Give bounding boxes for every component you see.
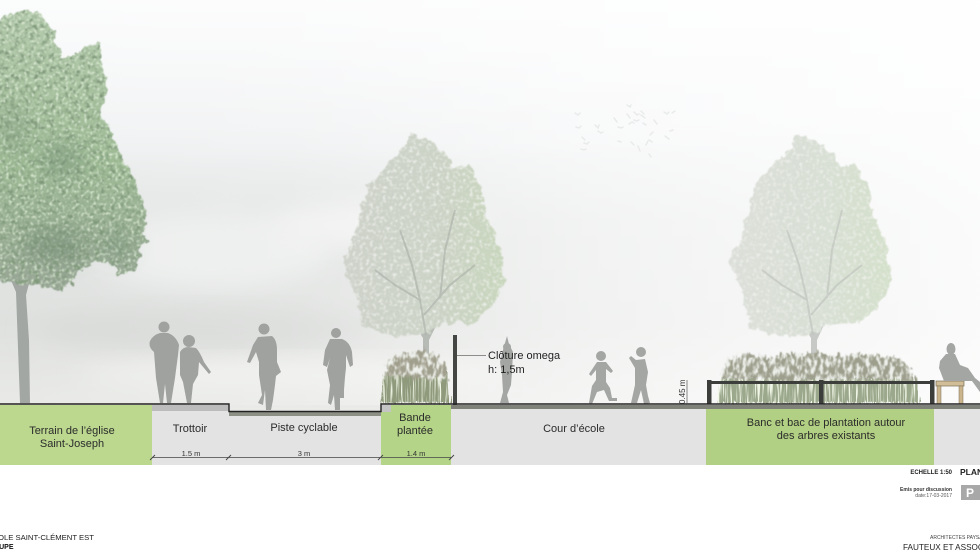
dimension: 0.45 m height: 0.45 m — [678, 379, 687, 404]
tree: middle tree — [343, 135, 505, 362]
trunk — [410, 312, 442, 362]
foliage — [0, 9, 145, 290]
bench — [936, 381, 964, 404]
trunk — [798, 312, 829, 362]
dimension: 1.4 m: 1.4 m — [407, 449, 425, 458]
label: banc et bac: Banc et bac de plantation autour — [747, 417, 905, 429]
ground: piste cyclable — [229, 412, 381, 465]
sky background — [0, 0, 980, 413]
planter: metal frame — [707, 380, 934, 404]
dimension: 1.5 m: 1.5 m — [182, 449, 200, 458]
ground: cour d'ecole — [451, 405, 980, 465]
callout: cloture omega: Clôture omega — [488, 350, 560, 362]
issue note: Emis pour discussion — [900, 487, 952, 493]
ground: trottoir — [152, 405, 229, 465]
label: cour d'ecole: Cour d’école — [543, 423, 605, 435]
plantation: bande plantee grasses — [380, 350, 450, 403]
label: terrain de l'eglise: Terrain de l’église — [29, 425, 115, 437]
issue note: date:17-03-2017 — [915, 493, 952, 499]
label: bande plantee: plantée — [397, 425, 433, 437]
people: cyclist one — [247, 324, 281, 410]
label: banc et bac: des arbres existants — [777, 430, 876, 442]
foliage — [730, 135, 892, 337]
label: terrain de l'eglise: Saint-Joseph — [40, 438, 104, 450]
dimension: 3 m: 3 m — [298, 449, 310, 458]
birds — [575, 105, 675, 157]
ground: bande plantee — [381, 405, 451, 465]
label: bande plantee: Bande — [399, 412, 431, 424]
label: piste cyclable: Piste cyclable — [270, 422, 338, 434]
trunk — [10, 278, 30, 403]
sheet badge — [961, 485, 980, 500]
people: jumping child — [629, 347, 650, 404]
branches — [375, 210, 475, 335]
branches — [762, 210, 862, 335]
tree: left large tree — [0, 9, 145, 403]
scale label: ECHELLE 1:50 — [910, 470, 953, 476]
ground: terrain de l'eglise — [0, 405, 152, 465]
people: walking couple — [150, 322, 211, 403]
sheet badge: P — [966, 486, 974, 500]
people: seated person — [939, 343, 980, 392]
callout: cloture omega: h: 1,5m — [488, 364, 525, 376]
fence post: cloture omega — [453, 335, 486, 405]
foliage shadows — [1, 104, 132, 263]
people: cyclist two — [323, 328, 353, 410]
ground: banc et bac de plantation — [706, 409, 934, 465]
dimension line — [150, 455, 454, 460]
ground profile line — [0, 404, 980, 412]
label: trottoir: Trottoir — [173, 423, 208, 435]
foliage — [343, 135, 505, 337]
tree: right tree — [730, 135, 892, 362]
planter: grasses — [718, 352, 920, 403]
people: child behind fence — [500, 336, 513, 403]
people: running child — [589, 351, 617, 404]
